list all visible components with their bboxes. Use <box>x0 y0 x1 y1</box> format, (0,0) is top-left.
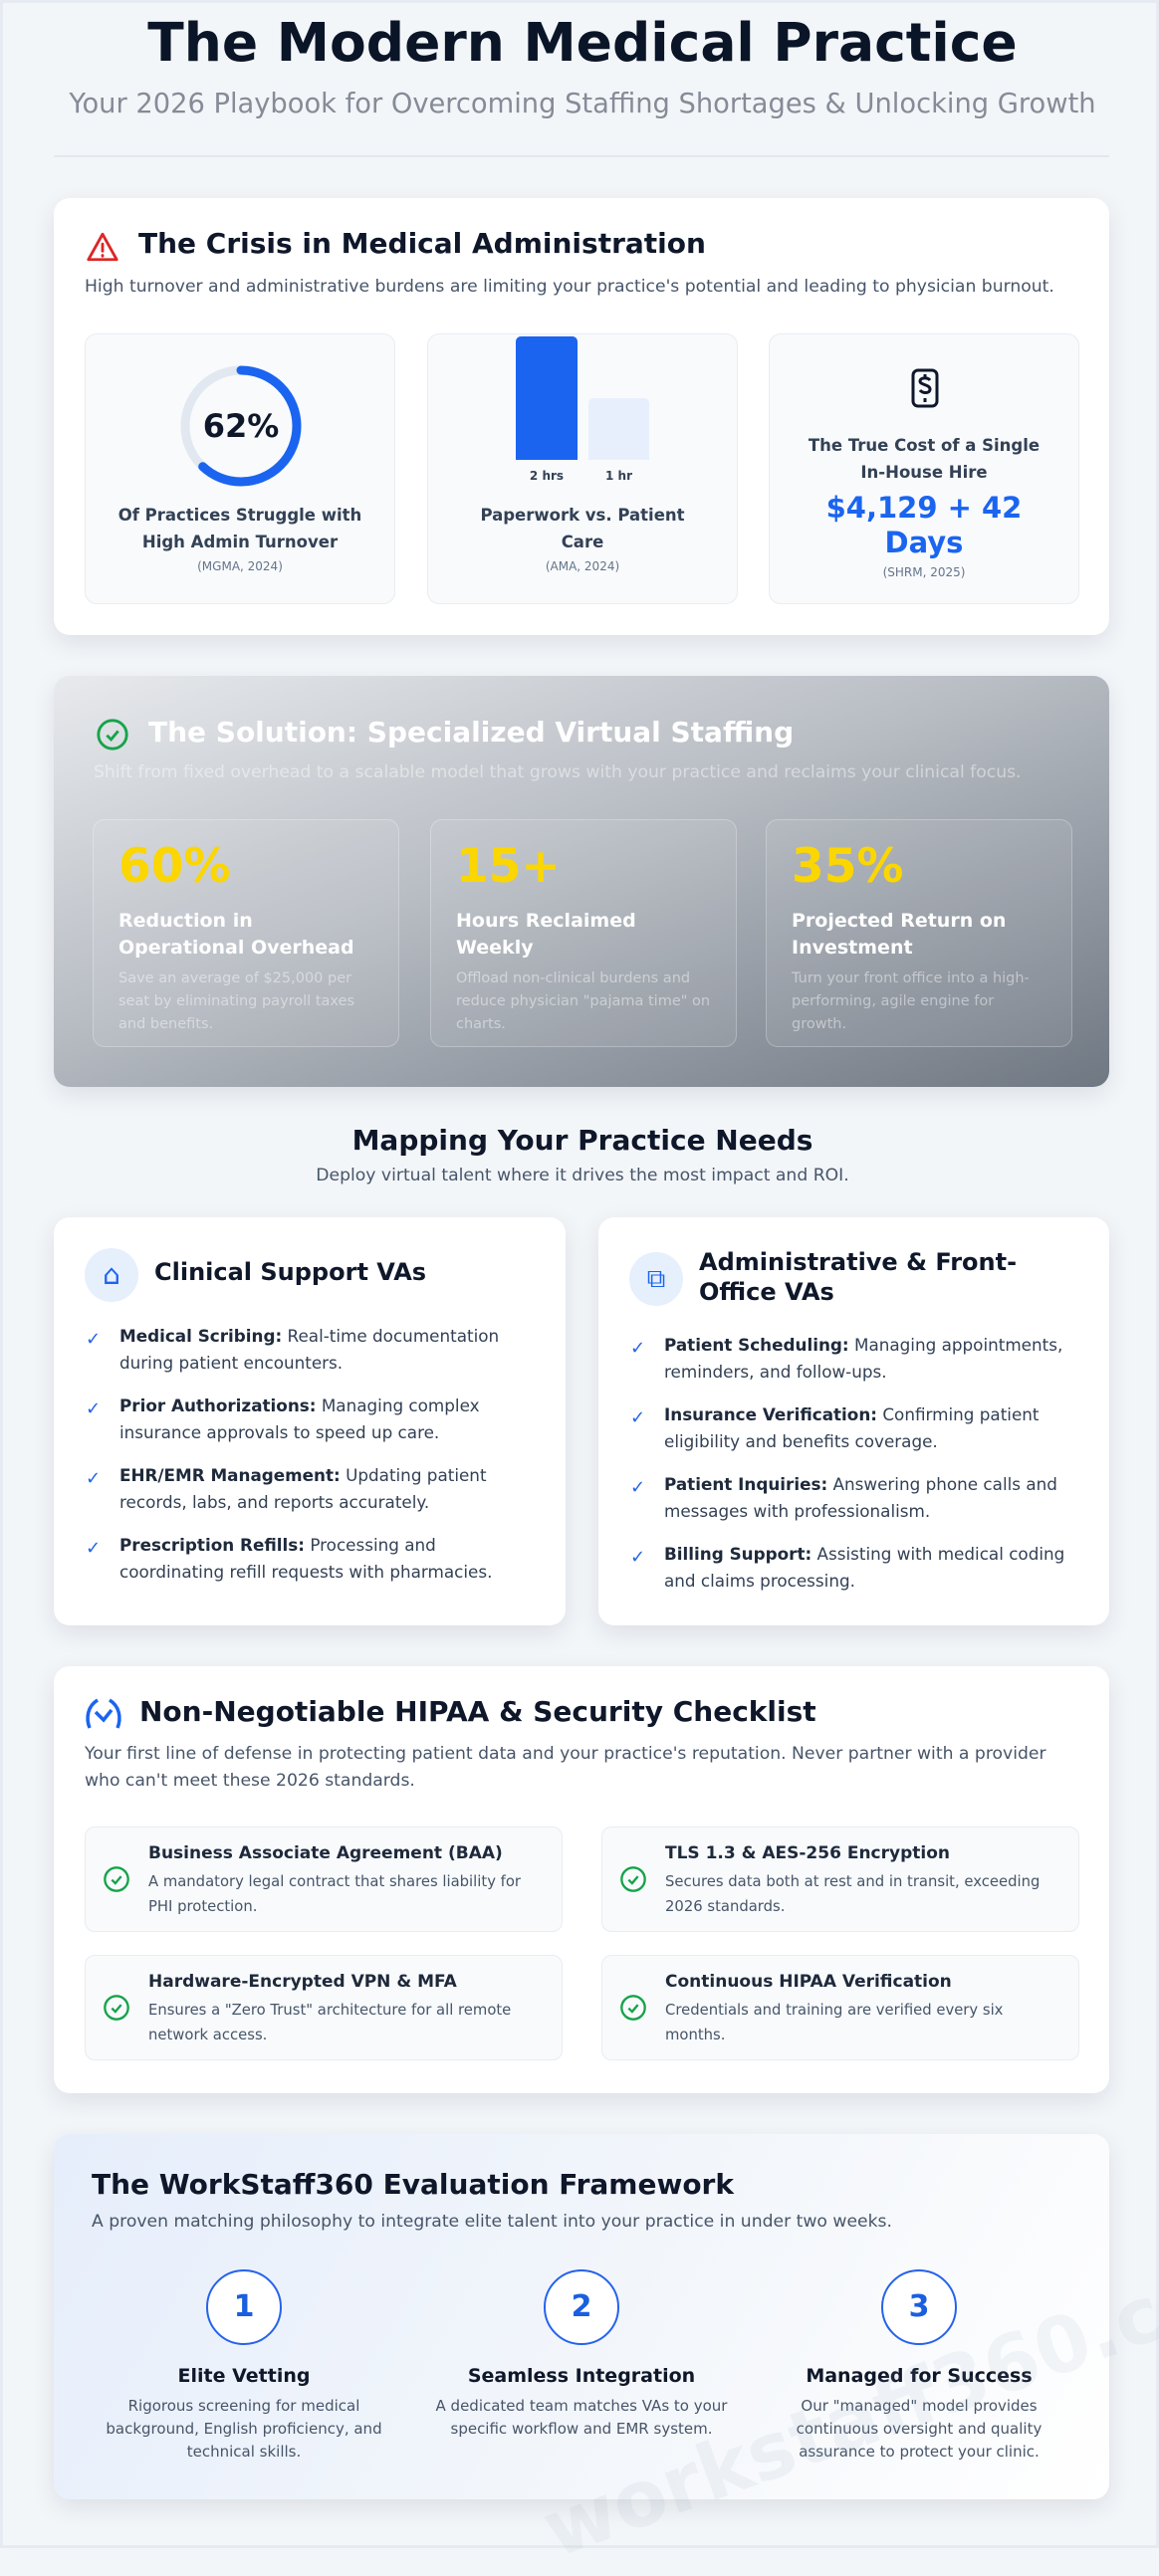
panel: clinical <box>54 1217 566 1625</box>
stat: 15+ <box>430 819 737 1047</box>
icon: check circle <box>97 719 128 751</box>
panel: crisis <box>54 198 1109 635</box>
step 1: Rigorous screening for medical background, English proficiency, and technical skills. <box>106 2397 382 2461</box>
text: Credentials and training are verified every six months. <box>665 2002 1003 2043</box>
panel: administrative: Billing Support: Assisting with medical coding and claims processing. <box>664 1544 1064 1591</box>
stat: cost: In-House Hire <box>860 463 988 482</box>
panel: clinical: Prescription Refills: Processing and coordinating refill requests with pharmacies. <box>119 1535 492 1582</box>
stat: paperwork bars: 2 hrs <box>530 469 564 483</box>
bar chart <box>516 336 578 460</box>
stat: 15+: Offload non-clinical burdens and reduce physician "pajama time" on charts. <box>456 970 710 1032</box>
step 1 <box>106 2269 382 2461</box>
stat: 35% <box>766 819 1072 1047</box>
checklist items <box>85 1826 563 1932</box>
panel: clinical: ✓ <box>86 1329 101 1350</box>
heading: Non-Negotiable HIPAA & Security Checklist <box>139 1695 816 1728</box>
donut chart: 62% <box>203 407 279 445</box>
panel: HIPAA <box>54 1666 1109 2093</box>
stat: 62%: High Admin Turnover <box>142 533 338 551</box>
stat: 60% <box>93 819 399 1047</box>
stat: 60%: Reduction in Operational Overhead <box>118 910 354 959</box>
subtitle: Your 2026 Playbook for Overcoming Staffing Shortages & Unlocking Growth <box>69 89 1096 119</box>
text: Ensures a "Zero Trust" architecture for all remote network access. <box>148 2002 511 2043</box>
panel: administrative: ✓ <box>630 1338 645 1359</box>
icon <box>85 1248 138 1302</box>
panel: clinical: ✓ <box>86 1398 101 1419</box>
panel: clinical: ✓ <box>86 1538 101 1559</box>
step 2: A dedicated team matches VAs to your specific workflow and EMR system. <box>436 2397 727 2438</box>
stat: cost: The True Cost of a Single <box>809 436 1040 455</box>
stat: cost <box>769 333 1079 604</box>
panel: administrative: ✓ <box>630 1407 645 1428</box>
stat: 35%: Projected Return on Investment <box>792 910 1006 959</box>
panel: administrative: ✓ <box>630 1477 645 1498</box>
stat: paperwork bars: 1 hr <box>605 469 632 483</box>
step 2: 2 <box>572 2289 591 2324</box>
heading: The Crisis in Medical Administration <box>138 227 706 260</box>
icon: dollar <box>912 368 938 408</box>
text: Shift from fixed overhead to a scalable model that grows with your practice and reclaims your clinical focus. <box>94 762 1022 782</box>
panel: administrative: Administrative & Front- <box>699 1248 1017 1276</box>
stat: cost: Days <box>885 526 963 559</box>
checklist items: Business Associate Agreement (BAA) <box>148 1843 503 1863</box>
step 2: Seamless Integration <box>468 2365 695 2387</box>
panel: administrative: Insurance Verification: Confirming patient eligibility and benefits coverage. <box>664 1404 1039 1451</box>
stat: paperwork bars: Care <box>562 533 603 551</box>
stat: 35%: Turn your front office into a high-performing, agile engine for growth. <box>792 970 1030 1032</box>
icon <box>629 1252 683 1306</box>
panel: clinical: Clinical Support VAs <box>154 1258 426 1286</box>
text: A proven matching philosophy to integrate elite talent into your practice in under two weeks. <box>92 2212 892 2232</box>
stat: 15+: Hours Reclaimed Weekly <box>456 910 636 959</box>
stat: paperwork bars: Paperwork vs. Patient <box>480 506 685 525</box>
step 3: Managed for Success <box>806 2365 1033 2387</box>
text: High turnover and administrative burdens are limiting your practice's potential and leading to physician burnout. <box>85 277 1054 297</box>
panel: clinical: Prior Authorizations: Managing complex insurance approvals to speed up care. <box>119 1395 480 1442</box>
stat: cost: $4,129 + 42 <box>826 491 1022 525</box>
text: TLS 1.3 & AES-256 Encryption <box>665 1843 950 1863</box>
heading: mapping: Mapping Your Practice Needs <box>352 1124 812 1157</box>
text: Hardware-Encrypted VPN & MFA <box>148 1972 457 1992</box>
stat: 15+: 15+ <box>456 839 561 894</box>
text: Secures data both at rest and in transit, exceeding 2026 standards. <box>665 1873 1040 1915</box>
icon: warning <box>87 233 118 261</box>
icon: ⌂ <box>103 1258 120 1291</box>
stat: 62% <box>85 333 395 604</box>
subheading: Deploy virtual talent where it drives the most impact and ROI. <box>316 1166 849 1185</box>
panel: framework <box>54 2134 1109 2499</box>
step 2 <box>436 2269 727 2438</box>
panel: administrative: Office VAs <box>699 1278 834 1306</box>
stat: cost: (SHRM, 2025) <box>883 565 965 579</box>
title: The Modern Medical Practice <box>147 11 1018 74</box>
panel: administrative <box>598 1217 1109 1625</box>
step 1: Elite Vetting <box>178 2365 310 2387</box>
stat: 35%: 35% <box>792 839 904 894</box>
panel: clinical: Medical Scribing: Real-time documentation during patient encounters. <box>119 1326 499 1373</box>
panel: administrative: ✓ <box>630 1547 645 1568</box>
stat: 60%: 60% <box>118 839 231 894</box>
text: Your first line of defense in protecting patient data and your practice's reputation. Never partner with a provider who can't meet these 2026 standards. <box>85 1744 1046 1791</box>
panel: clinical: EHR/EMR Management: Updating patient records, labs, and reports accurately. <box>119 1465 487 1512</box>
panel: administrative: Patient Inquiries: Answering phone calls and messages with professionalism. <box>664 1474 1057 1521</box>
heading: The Solution: Specialized Virtual Staffing <box>148 716 794 749</box>
stat: 60%: Save an average of $25,000 per seat by eliminating payroll taxes and benefits. <box>118 970 354 1032</box>
checklist items: A mandatory legal contract that shares liability for PHI protection. <box>148 1873 521 1915</box>
panel: solution <box>54 676 1109 1087</box>
step 1: 1 <box>234 2289 254 2324</box>
panel: clinical: ✓ <box>86 1468 101 1489</box>
stat: 62%: Of Practices Struggle with <box>118 506 361 525</box>
panel: administrative: Patient Scheduling: Managing appointments, reminders, and follow-ups. <box>664 1335 1062 1382</box>
donut chart <box>181 366 301 486</box>
heading: The WorkStaff360 Evaluation Framework <box>92 2168 734 2201</box>
step 3: 3 <box>909 2289 929 2324</box>
icon: shield <box>86 1698 121 1729</box>
stat: paperwork bars <box>427 333 738 604</box>
step 3 <box>797 2269 1042 2461</box>
icon: ⧉ <box>647 1264 665 1294</box>
stat: 62%: (MGMA, 2024) <box>197 559 283 573</box>
stat: paperwork bars: (AMA, 2024) <box>546 559 619 573</box>
text: Continuous HIPAA Verification <box>665 1972 952 1992</box>
step 3: Our "managed" model provides continuous oversight and quality assurance to protect your clinic. <box>797 2397 1042 2461</box>
